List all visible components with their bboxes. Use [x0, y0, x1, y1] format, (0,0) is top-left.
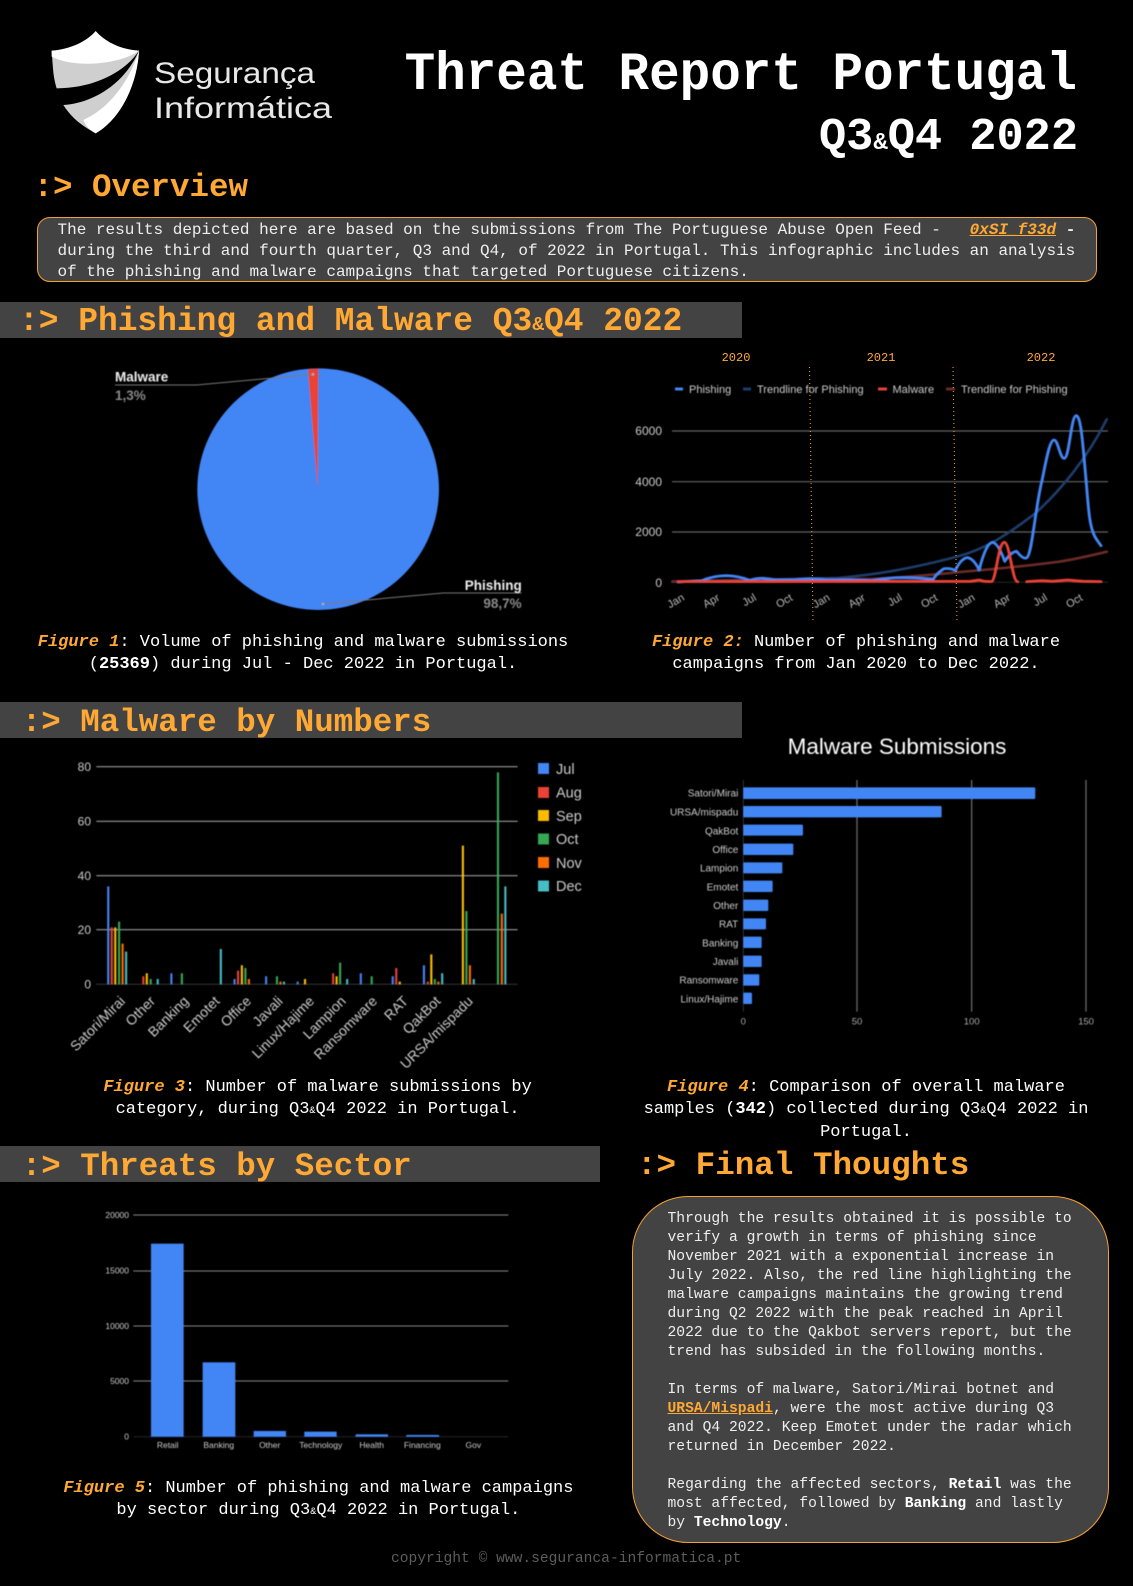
bar chart category labels: Emotet [180, 993, 223, 1035]
line chart month axis: Oct [919, 592, 940, 611]
bar chart: malware submissions by category per month: 60 [78, 814, 91, 828]
bar chart category labels: Lampion [300, 993, 349, 1042]
bar chart category labels: QakBot [399, 993, 444, 1037]
bar chart legend: Oct [556, 832, 579, 848]
bar chart: malware submissions total: 50 [852, 1016, 862, 1028]
year labels above line chart: 2021 [867, 351, 895, 365]
pie chart: phishing vs malware: Malware [115, 370, 169, 384]
line chart month axis: Jan [665, 592, 687, 611]
bar chart: malware submissions total: 100 [964, 1016, 980, 1028]
heading: threats by sector: :> Threats by Sector [22, 1148, 412, 1185]
heading: overview: :> Overview [34, 169, 248, 206]
bar chart: malware submissions total: Linux/Hajime [680, 994, 739, 1006]
bar chart category labels: Linux/Hajime [249, 993, 317, 1061]
bar chart legend: Jul [556, 762, 575, 778]
title: Threat Report Portugal [405, 45, 1077, 106]
line chart legend [675, 384, 1068, 396]
bar chart: threats by sector: Health [359, 1440, 384, 1450]
logo: Segurança Informática [52, 31, 332, 133]
bar chart category labels: Javali [249, 993, 286, 1029]
section bar: phishing and malware [0, 302, 742, 338]
bar chart: malware submissions by category per month [67, 760, 583, 1072]
bar chart category labels: Banking [145, 993, 192, 1040]
bar chart: malware submissions by category per month: 20 [78, 923, 91, 937]
subtitle: Q3&Q4 2022 [819, 111, 1078, 163]
year labels above line chart [722, 351, 1055, 365]
bar chart category labels: Ransomware [310, 993, 380, 1062]
caption: figure 3: Figure 3: Number of malware submissions by category, during Q3&Q4 2022 in Portugal. [103, 1078, 532, 1119]
heading: malware by numbers: :> Malware by Numbers [22, 704, 431, 740]
bar chart: malware submissions total: QakBot [705, 826, 739, 838]
bar chart: threats by sector: 0 [124, 1432, 129, 1442]
line chart: phishing and malware campaigns 2020-2022: 0 [655, 576, 662, 590]
logo wordmark: Informática [154, 92, 332, 125]
bar chart legend: Nov [556, 856, 583, 872]
bar chart category labels: URSA/mispadu [397, 993, 476, 1072]
bar chart: threats by sector: 10000 [105, 1321, 129, 1331]
bar chart: malware submissions total: Satori/Mirai [688, 788, 738, 800]
bar chart category labels [67, 992, 476, 1072]
bar chart legend: Dec [556, 879, 582, 895]
year labels above line chart: 2020 [722, 351, 750, 365]
bar chart: malware submissions by category per month: 0 [84, 978, 91, 992]
bar chart: malware submissions total: Javali [713, 957, 738, 968]
bar chart: threats by sector [105, 1210, 508, 1450]
line chart month axis: Jan [811, 592, 832, 611]
pie chart: phishing vs malware [115, 368, 522, 611]
bar chart: malware submissions total: 150 [1078, 1016, 1094, 1028]
bar chart: malware submissions total: Malware Submissions [788, 734, 1006, 759]
bar chart category labels: Other [122, 993, 158, 1029]
line chart month axis: Oct [774, 592, 795, 611]
bar chart: malware submissions by category per month: 40 [78, 869, 91, 883]
line chart: phishing and malware campaigns 2020-2022: 6000 [635, 424, 662, 438]
bar chart: malware submissions total: RAT [719, 920, 738, 930]
line chart month axis: Jul [886, 592, 904, 609]
bar chart: threats by sector: Gov [466, 1440, 482, 1450]
panel: overview text [37, 216, 1097, 282]
heading: final thoughts: :> Final Thoughts [637, 1147, 969, 1184]
caption: figure 4: Figure 4: Comparison of overall malware samples (342) collected during Q3&Q4 2022 in Portugal. [644, 1078, 1088, 1142]
bar chart: malware submissions total: Emotet [707, 882, 739, 894]
bar chart legend: Aug [556, 786, 582, 802]
caption: figure 5: Figure 5: Number of phishing and malware campaigns by sector during Q3&Q4 2022 in Portugal. [63, 1479, 573, 1520]
overview paragraph: The results depicted here are based on the submissions from The Portuguese Abuse Open Feed - 0xSI_f33d - during the third and fourth quarter, Q3 and Q4, of 2022 in Portugal. This infographic includes an analysis of the phishing and malware campaigns that targeted Portuguese citizens. [58, 221, 1075, 281]
pie chart: phishing vs malware: Phishing [465, 578, 522, 593]
bar chart: threats by sector: 5000 [110, 1376, 129, 1386]
bar chart: malware submissions total: Other [713, 901, 739, 912]
final thoughts text: Through the results obtained it is possible to verify a growth in terms of phishing since November 2021 with a exponential increase in July 2022. Also, the red line highlighting the malware campaigns maintains the growing trend during Q2 2022 with the peak reached in April 2022 due to the Qakbot servers report, but the trend has subsided in the following months. In terms of malware, Satori/Mirai botnet and URSA/Mispadi, were the most active during Q3 and Q4 2022. Keep Emotet under the radar which returned in December 2022. Regarding the affected sectors, Retail was the most affected, followed by Banking and lastly by Technology. [668, 1210, 1072, 1530]
line chart month axis: Jul [1031, 592, 1050, 609]
line chart legend: Phishing [689, 384, 731, 396]
pie chart: phishing vs malware: 98,7% [483, 596, 522, 611]
bar chart: threats by sector: Banking [203, 1440, 234, 1450]
bar chart category labels: Satori/Mirai [67, 993, 128, 1054]
line chart legend: Trendline for Phishing [757, 384, 864, 396]
line chart month axis: Oct [1064, 592, 1085, 611]
heading: phishing and malware: :> Phishing and Malware Q3&Q4 2022 [19, 303, 682, 340]
caption: figure 2: Figure 2: Number of phishing and malware campaigns from Jan 2020 to Dec 2022. [652, 633, 1060, 674]
line chart month axis: Apr [701, 592, 722, 611]
line chart legend: Malware [892, 384, 934, 396]
bar chart: threats by sector: Technology [299, 1440, 343, 1450]
section bar: threats by sector [0, 1146, 600, 1182]
bar chart: malware submissions total: Banking [702, 938, 738, 950]
icon: shield [52, 31, 139, 133]
bar chart category labels: RAT [381, 992, 411, 1023]
logo wordmark: Segurança [154, 57, 315, 90]
caption: figure 1: Figure 1: Volume of phishing and malware submissions (25369) during Jul - Dec 2022 in Portugal. [38, 633, 568, 674]
bar chart: threats by sector: Retail [157, 1440, 179, 1450]
bar chart legend [538, 762, 583, 895]
bar chart: threats by sector: Financing [404, 1440, 441, 1450]
line chart month axis: Apr [847, 592, 868, 611]
line chart month axis [665, 592, 1085, 611]
line chart: phishing and malware campaigns 2020-2022 [635, 384, 1108, 611]
line chart: phishing and malware campaigns 2020-2022: 4000 [635, 475, 662, 489]
bar chart: malware submissions total: URSA/mispadu [670, 808, 738, 818]
copyright footer: copyright © www.seguranca-informatica.pt [391, 1551, 741, 1567]
line chart month axis: Jan [956, 592, 977, 611]
bar chart: malware submissions by category per month: 80 [78, 760, 91, 774]
year labels above line chart: 2022 [1027, 351, 1055, 365]
line chart month axis: Apr [992, 592, 1013, 611]
section bar: malware by numbers [0, 702, 742, 738]
bar chart category labels: Office [217, 993, 254, 1030]
bar chart legend: Sep [556, 809, 582, 825]
bar chart: threats by sector: 20000 [105, 1210, 129, 1220]
line chart: phishing and malware campaigns 2020-2022: 2000 [635, 525, 662, 539]
year dividers on line chart [810, 367, 957, 623]
pie chart: phishing vs malware: 1,3% [115, 388, 146, 403]
bar chart: threats by sector: Other [259, 1440, 280, 1450]
panel: final thoughts [632, 1196, 1108, 1542]
bar chart: malware submissions total: Office [712, 845, 739, 856]
bar chart: malware submissions total [670, 734, 1094, 1028]
line chart month axis: Jul [740, 592, 759, 609]
line chart legend: Trendline for Phishing [961, 384, 1068, 396]
bar chart: threats by sector: 15000 [105, 1266, 129, 1276]
bar chart: malware submissions total: Lampion [700, 864, 738, 874]
bar chart: malware submissions total: Ransomware [679, 976, 739, 986]
logo wordmark [154, 57, 332, 125]
bar chart: malware submissions total: 0 [741, 1016, 746, 1028]
